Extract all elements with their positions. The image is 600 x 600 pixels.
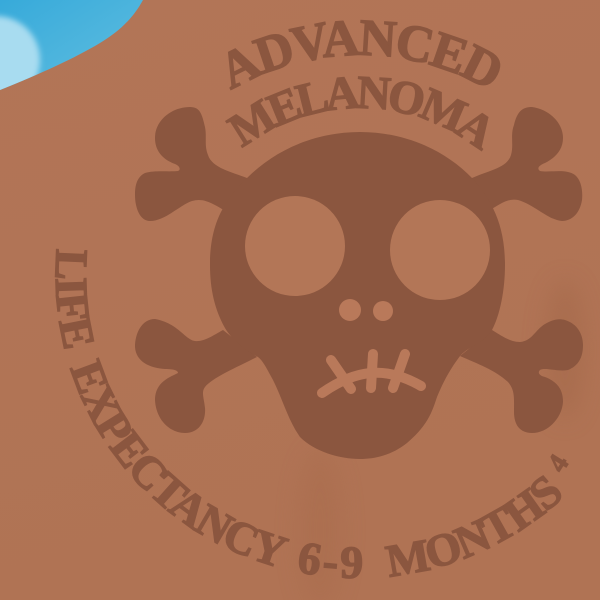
cloud highlight (0, 16, 40, 104)
superscript reference: 4 (542, 449, 575, 478)
icon: crossbones (135, 107, 583, 433)
icon: right eye (390, 200, 490, 300)
icon: left eye (245, 196, 345, 296)
icon: skull head (210, 132, 505, 459)
icon: nose (339, 299, 393, 321)
heading: melanoma: MELANOMA (225, 76, 488, 152)
curved caption: life expectancy: LIFE EXPECTANCY 6-9 MONTHS (54, 248, 562, 579)
icon: stitched mouth (322, 354, 421, 393)
skin shading (298, 280, 585, 600)
skull and crossbones (135, 107, 583, 459)
heading: advanced: ADVANCED (228, 20, 500, 90)
sky corner (0, 0, 143, 90)
